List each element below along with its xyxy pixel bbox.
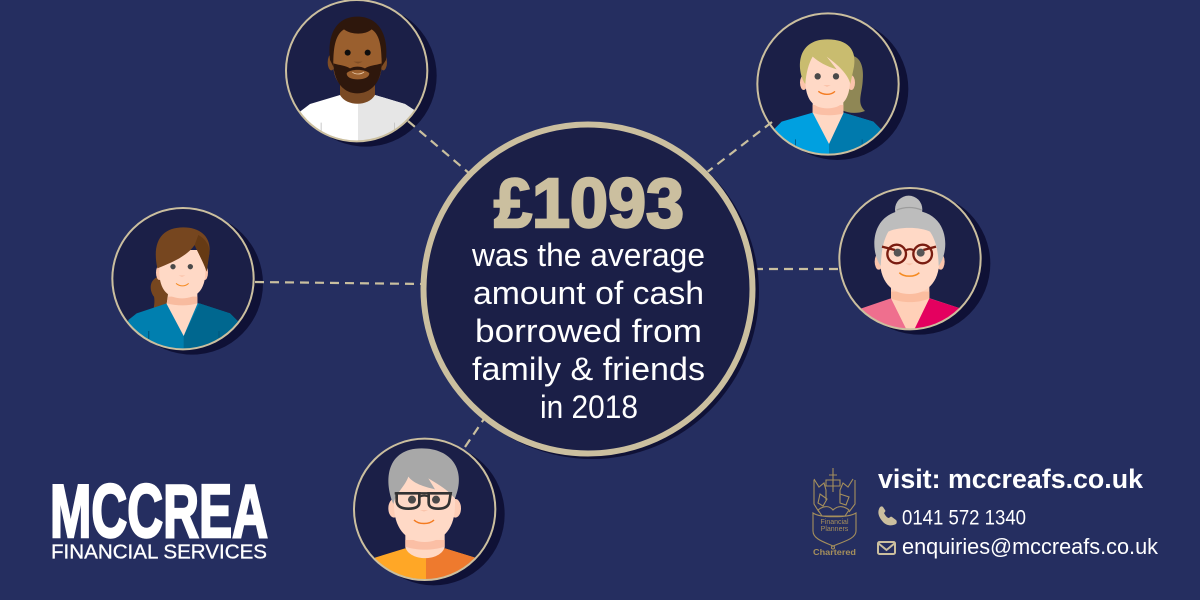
contact: phone number: 0141 572 1340 — [902, 506, 1026, 530]
headline figure: £1093 — [494, 164, 684, 242]
avatar: blonde woman — [757, 13, 908, 160]
dashed connector lines — [255, 121, 838, 447]
central circle with statistic — [424, 124, 759, 459]
avatar: brunette woman — [112, 208, 263, 355]
icon: phone — [878, 506, 897, 525]
logo: McCrea Financial Services: FINANCIAL SERVICES — [51, 540, 267, 564]
logo: McCrea Financial Services — [50, 469, 268, 564]
statistic description: in 2018 — [540, 389, 638, 425]
statistic description: amount of cash — [473, 275, 704, 311]
contact: email: enquiries@mccreafs.co.uk — [902, 534, 1159, 559]
crest: Chartered Financial Planners: Planners — [821, 526, 849, 533]
crest: Chartered Financial Planners: Chartered — [813, 548, 856, 557]
avatar: older woman with glasses — [839, 188, 990, 337]
crest: Chartered Financial Planners: Financial — [820, 519, 849, 526]
icon: envelope — [878, 542, 895, 554]
crest: Chartered Financial Planners — [813, 468, 856, 557]
statistic description: family & friends — [472, 351, 705, 387]
logo: McCrea Financial Services: MCCREA — [50, 469, 268, 553]
avatar: grey-haired man with glasses — [354, 439, 505, 587]
statistic description: was the average — [471, 237, 705, 273]
statistic description — [471, 237, 705, 425]
contact: website: visit: mccreafs.co.uk — [878, 464, 1144, 494]
statistic description: borrowed from — [475, 313, 702, 349]
avatar: bearded man — [286, 0, 437, 147]
